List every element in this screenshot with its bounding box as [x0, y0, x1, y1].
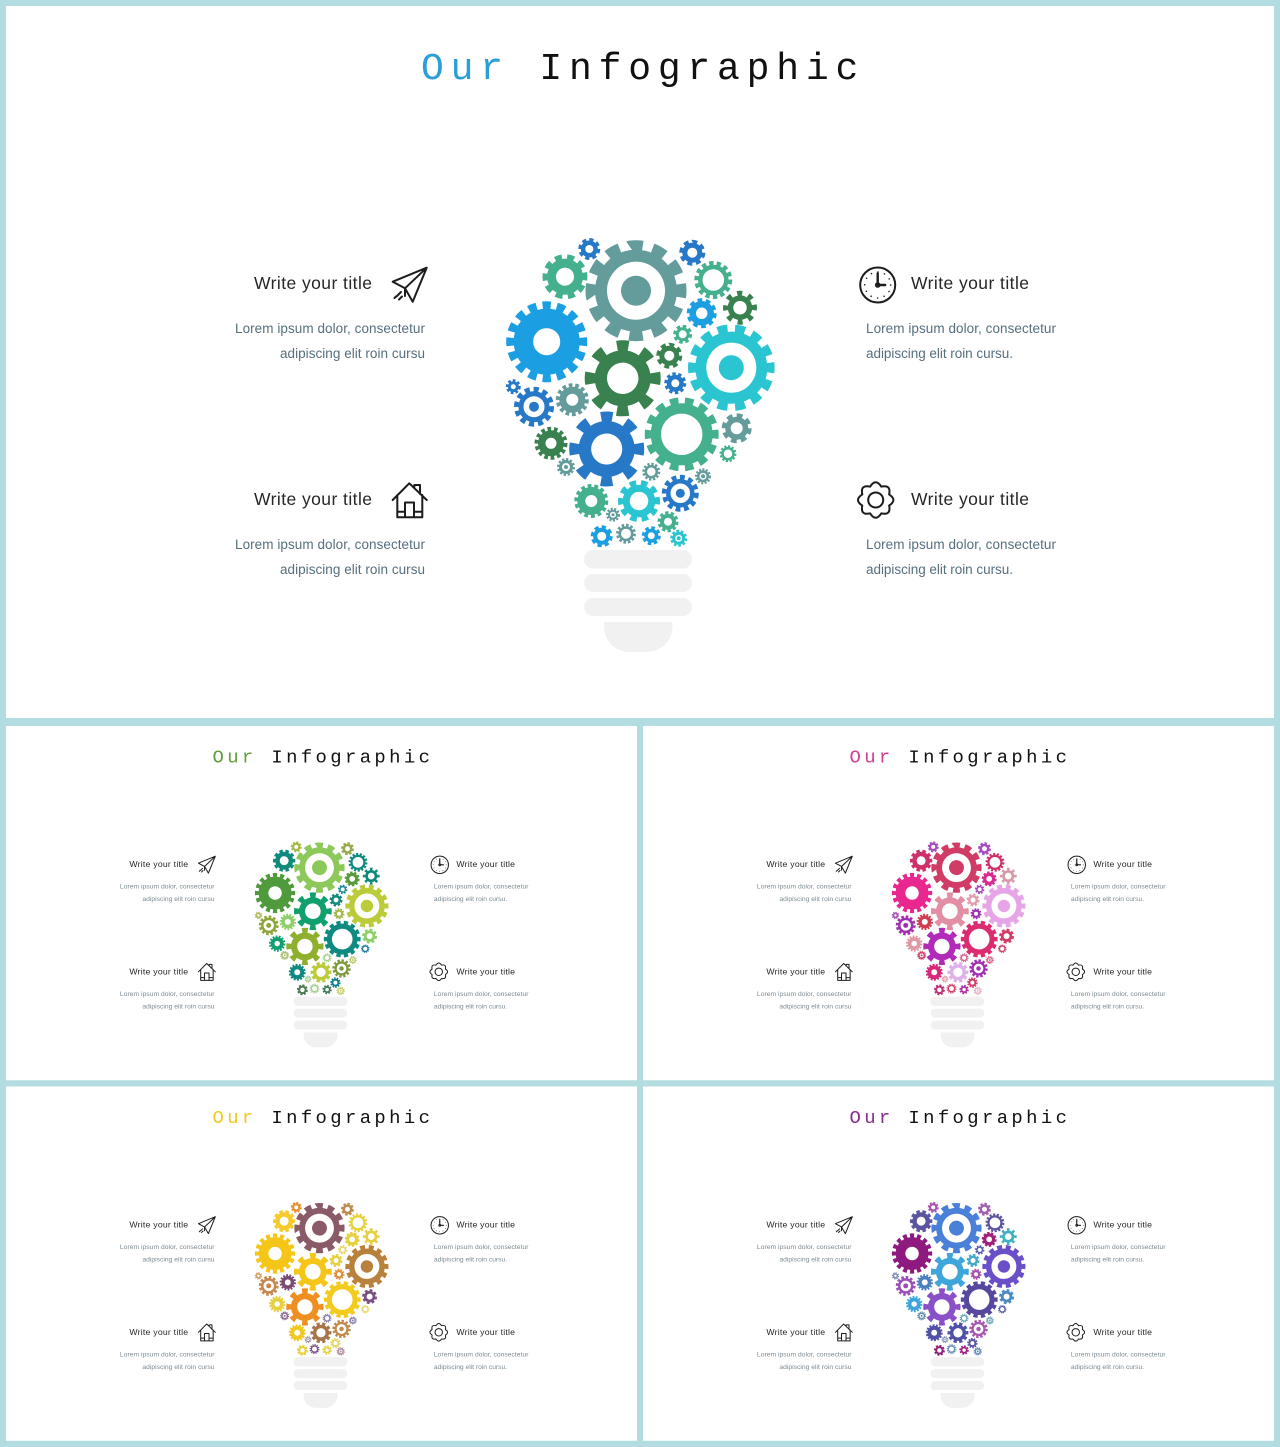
text block: bottom left: [757, 966, 852, 1011]
text block: bottom right: [1071, 1327, 1166, 1371]
icon: house: [198, 1324, 215, 1341]
text block: bottom left: Lorem ipsum dolor, consectetur: [757, 991, 852, 998]
text block: bottom left: Write your title: [766, 1327, 825, 1337]
text block: bottom right: Lorem ipsum dolor, consectetur: [434, 1352, 529, 1359]
gear 12: [689, 300, 715, 326]
text block: bottom left: Write your title: [766, 966, 825, 976]
text block: bottom right: Lorem ipsum dolor, consectetur: [434, 991, 529, 998]
text block: top right: Lorem ipsum dolor, consectetur: [1071, 1244, 1166, 1251]
icon: cog outline: [858, 482, 893, 518]
text block: top left: adipiscing elit roin cursu: [779, 1257, 852, 1264]
text block: bottom right: adipiscing elit roin cursu.: [1071, 1364, 1144, 1371]
text block: bottom right: [434, 1327, 529, 1371]
text block: bottom left: [120, 966, 215, 1011]
icon: paper plane: [835, 856, 852, 873]
icon: house: [393, 483, 427, 517]
text block: top right: adipiscing elit roin cursu.: [866, 346, 1013, 361]
panel: purple variant: [643, 1086, 1274, 1441]
gear 23: [644, 464, 659, 479]
icon: clock: [431, 856, 448, 874]
text block: bottom left: Write your title: [129, 966, 188, 976]
text block: bottom left: [235, 489, 426, 577]
icon: house: [835, 963, 852, 980]
text block: top right: Write your title: [1093, 859, 1152, 869]
panel: pink variant: [643, 726, 1274, 1080]
gear 11: [724, 291, 756, 324]
text block: bottom right: adipiscing elit roin cursu.: [1071, 1004, 1144, 1011]
text block: top left: [235, 273, 426, 361]
text block: bottom right: adipiscing elit roin cursu.: [866, 562, 1013, 577]
text block: bottom right: [434, 966, 529, 1011]
gear 32: [644, 528, 659, 543]
gear 22: [558, 460, 574, 474]
gear 7: [542, 254, 588, 300]
gear 27: [576, 486, 606, 516]
text block: top right: adipiscing elit roin cursu.: [434, 1257, 507, 1264]
panel: green variant: [6, 726, 637, 1080]
text block: top right: Lorem ipsum dolor, consectetur: [434, 1244, 529, 1251]
gear: large right: [687, 324, 775, 412]
text block: top left: Write your title: [766, 859, 825, 869]
text block: top right: Lorem ipsum dolor, consectetur: [866, 321, 1056, 336]
text block: top left: [757, 859, 852, 903]
gear: large top centre: [584, 239, 688, 342]
icon: paper plane: [835, 1217, 852, 1234]
gear 26: [618, 480, 660, 522]
text block: bottom left: [120, 1327, 215, 1371]
text block: top left: adipiscing elit roin cursu: [779, 896, 852, 903]
text block: bottom left: Lorem ipsum dolor, consectetur: [757, 1352, 852, 1359]
gear 13: [675, 327, 690, 342]
gear 21: [537, 429, 565, 458]
lightbulb: purple gears: [892, 1203, 1026, 1408]
text block: top left: Lorem ipsum dolor, consectetur: [757, 884, 852, 891]
text block: bottom right: Write your title: [1093, 966, 1152, 976]
text block: bottom right: Write your title: [456, 1327, 515, 1337]
text block: top right: Write your title: [1093, 1219, 1152, 1229]
text block: bottom right: Lorem ipsum dolor, consectetur: [866, 537, 1056, 552]
text block: top right: [1071, 859, 1166, 903]
text block: bottom right: adipiscing elit roin cursu.: [434, 1004, 507, 1011]
text block: top left: [120, 859, 215, 903]
text block: bottom right: Lorem ipsum dolor, consectetur: [1071, 991, 1166, 998]
gear 31: [618, 525, 634, 542]
gear 14: [658, 345, 680, 367]
gear 33: [672, 531, 686, 545]
text block: bottom right: Write your title: [456, 966, 515, 976]
text block: top right: [434, 1219, 529, 1264]
text block: top right: Write your title: [456, 859, 515, 869]
gear 16: [724, 416, 749, 441]
text block: top right: [866, 273, 1056, 361]
title: purple: Our Infographic: [849, 1107, 1070, 1129]
icon: paper plane: [393, 268, 427, 302]
gear 15: [666, 374, 685, 393]
icon: paper plane: [198, 1217, 215, 1234]
text block: top left: Lorem ipsum dolor, consectetur: [120, 1244, 215, 1251]
title: yellow: Our Infographic: [212, 1107, 433, 1129]
icon: paper plane: [198, 856, 215, 873]
text block: bottom left: Lorem ipsum dolor, consectetur: [120, 1352, 215, 1359]
text block: top left: Write your title: [254, 273, 372, 293]
lightbulb: yellow gears: [255, 1203, 389, 1408]
text block: top right: adipiscing elit roin cursu.: [1071, 1257, 1144, 1264]
gear 18: [507, 381, 519, 393]
text block: bottom right: Write your title: [1093, 1327, 1152, 1337]
text block: bottom left: Lorem ipsum dolor, consectetur: [235, 537, 426, 552]
gear 8: [580, 240, 599, 258]
gear 19: [517, 389, 551, 424]
text block: top right: Write your title: [911, 273, 1029, 293]
text block: top left: Lorem ipsum dolor, consectetur: [757, 1244, 852, 1251]
text block: top right: [1071, 1219, 1166, 1264]
text block: top right: Lorem ipsum dolor, consectetur: [1071, 884, 1166, 891]
gear 24: [696, 470, 710, 483]
bulb base bars and cap: [584, 550, 692, 652]
lightbulb made of gears: [507, 239, 775, 652]
text block: bottom left: Write your title: [129, 1327, 188, 1337]
text block: top left: Lorem ipsum dolor, consectetur: [235, 321, 426, 336]
icon: clock: [1068, 856, 1085, 874]
text block: top right: adipiscing elit roin cursu.: [434, 896, 507, 903]
icon: house: [835, 1324, 852, 1341]
text block: bottom right: adipiscing elit roin cursu.: [434, 1364, 507, 1371]
text block: bottom left: Lorem ipsum dolor, consectetur: [120, 991, 215, 998]
text block: bottom right: [1071, 966, 1166, 1011]
icon: cog outline: [430, 963, 448, 981]
gear 17: [721, 447, 735, 461]
gear: lower centre eight tooth: [569, 412, 644, 486]
gear 28: [608, 509, 618, 520]
text block: top left: Write your title: [129, 859, 188, 869]
text block: bottom left: adipiscing elit roin cursu: [779, 1004, 852, 1011]
gear 29: [659, 513, 677, 530]
text block: bottom left: [757, 1327, 852, 1371]
text block: top left: Write your title: [766, 1219, 825, 1229]
text block: top right: [434, 859, 529, 903]
gear: lower right large: [644, 397, 719, 472]
text block: bottom left: Write your title: [254, 489, 372, 509]
icon: cog outline: [1067, 1323, 1085, 1341]
text block: top right: Write your title: [456, 1219, 515, 1229]
icon: cog outline: [1067, 963, 1085, 981]
text block: top right: Lorem ipsum dolor, consectetur: [434, 884, 529, 891]
gear 10: [697, 264, 730, 296]
icon: clock: [860, 268, 895, 302]
text block: top left: Lorem ipsum dolor, consectetur: [120, 884, 215, 891]
gear 30: [592, 527, 611, 546]
panel: yellow variant: [6, 1086, 637, 1441]
text block: bottom right: Write your title: [911, 489, 1029, 509]
text block: bottom left: adipiscing elit roin cursu: [779, 1364, 852, 1371]
text block: top left: Write your title: [129, 1219, 188, 1229]
gear 9: [681, 242, 703, 264]
icon: clock: [431, 1217, 448, 1234]
text block: bottom left: adipiscing elit roin cursu: [280, 562, 425, 577]
icon: cog outline: [430, 1323, 448, 1341]
panel: main blue infographic: [6, 6, 1274, 718]
text block: bottom left: adipiscing elit roin cursu: [142, 1004, 215, 1011]
gear 20: [558, 385, 587, 414]
text block: top right: adipiscing elit roin cursu.: [1071, 896, 1144, 903]
title: Our Infographic: [421, 48, 865, 91]
text block: bottom right: [866, 489, 1056, 577]
title: green: Our Infographic: [212, 746, 433, 768]
gear: large left: [507, 302, 587, 382]
title: pink: Our Infographic: [849, 746, 1070, 768]
text block: top left: [120, 1219, 215, 1264]
text block: top left: adipiscing elit roin cursu: [142, 1257, 215, 1264]
icon: clock: [1068, 1217, 1085, 1234]
text block: top left: adipiscing elit roin cursu: [142, 896, 215, 903]
gear: centre eight tooth: [585, 341, 660, 416]
lightbulb: green gears: [255, 842, 389, 1047]
text block: top left: adipiscing elit roin cursu: [280, 346, 425, 361]
text block: top left: [757, 1219, 852, 1264]
icon: house: [198, 963, 215, 980]
lightbulb: pink gears: [892, 842, 1026, 1047]
gear 25: [665, 478, 696, 509]
text block: bottom right: Lorem ipsum dolor, consectetur: [1071, 1352, 1166, 1359]
text block: bottom left: adipiscing elit roin cursu: [142, 1364, 215, 1371]
